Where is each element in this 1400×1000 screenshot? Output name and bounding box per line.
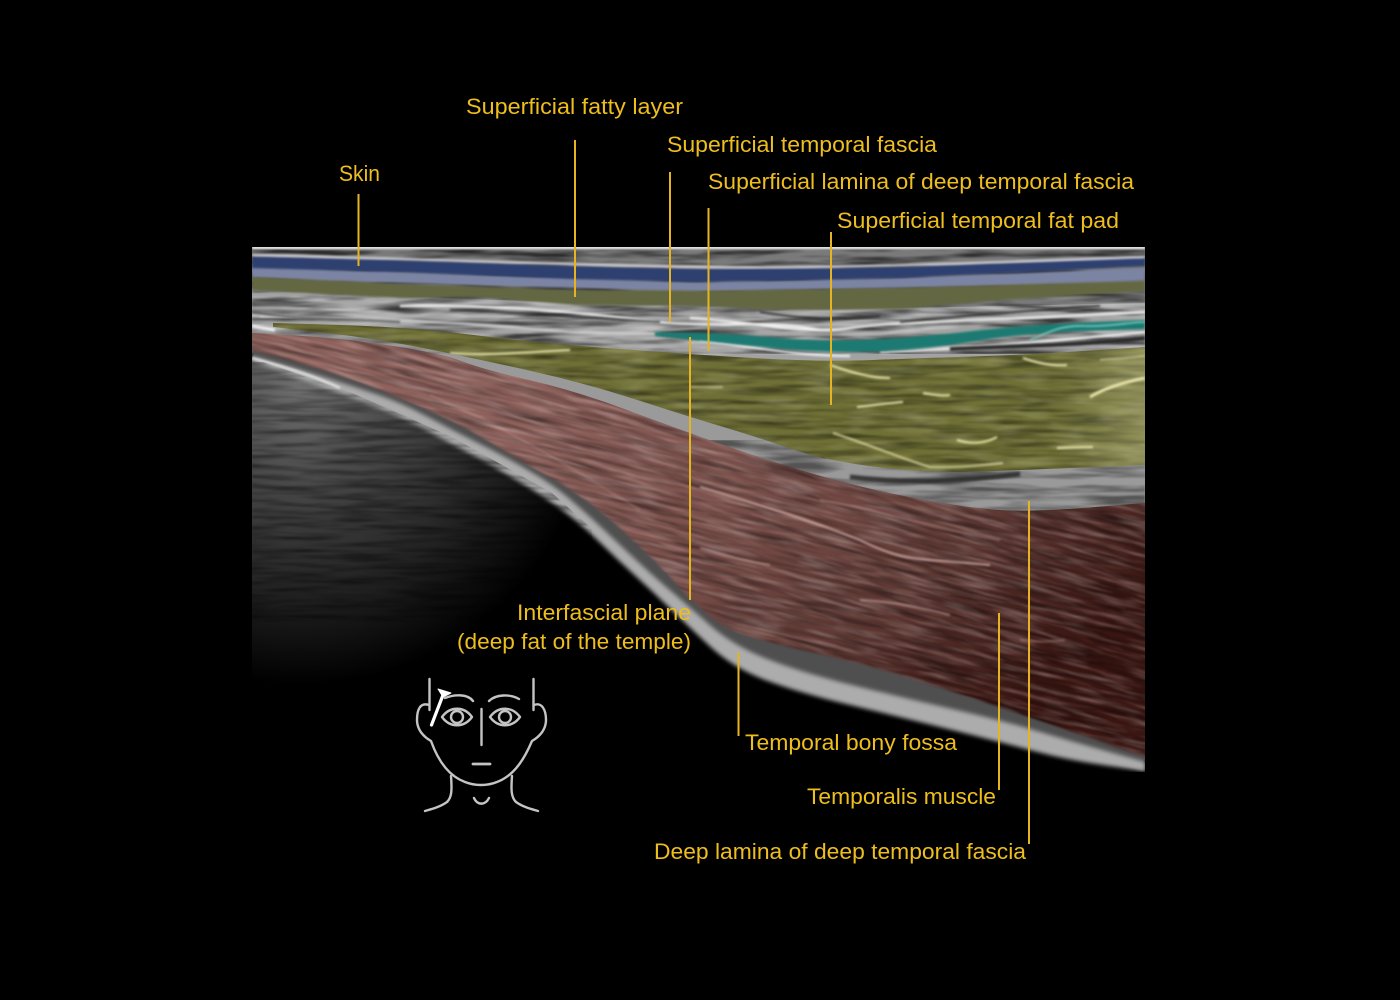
icon: face with probe position bbox=[417, 679, 546, 811]
icon part: ears and jaw bbox=[417, 704, 546, 785]
texture: deep speckle bbox=[252, 362, 592, 622]
icon part: ultrasound probe marker bbox=[432, 695, 443, 725]
texture: bright fibres bbox=[430, 395, 1065, 642]
label: interfascial plane: Interfascial plane bbox=[517, 600, 691, 625]
ultrasound image with coloured tissue layers bbox=[252, 247, 1145, 786]
label: deep fat of the temple: (deep fat of the temple) bbox=[457, 629, 691, 654]
layer: gray fascia bands bbox=[252, 288, 1145, 366]
label: superficial fatty layer: Superficial fatty layer bbox=[466, 94, 683, 119]
label: temporal bony fossa: Temporal bony fossa bbox=[745, 730, 958, 755]
icon part: right eye bbox=[490, 709, 520, 725]
layer: deep speckle below bone bbox=[252, 358, 547, 662]
icon part: eyebrows bbox=[445, 695, 519, 701]
texture: fat pad dark mottling bbox=[252, 320, 1145, 480]
layer: darker blue band bbox=[252, 256, 1145, 282]
icon part: neck bbox=[425, 776, 538, 811]
icon part: mouth bbox=[473, 763, 490, 765]
line: superficial fatty layer bbox=[574, 140, 576, 297]
icon part: collarbone notch bbox=[474, 798, 489, 804]
layer: temporal bone surface bbox=[252, 356, 1145, 771]
label: temporalis muscle: Temporalis muscle bbox=[807, 784, 996, 809]
line: superficial lamina bbox=[708, 208, 710, 351]
icon part: right iris bbox=[499, 711, 511, 723]
layer: teal fascial band bbox=[655, 320, 1145, 352]
texture: dark streaks in the gray fascia above the muscle bbox=[700, 440, 1145, 515]
icon part: probe arrowhead bbox=[438, 689, 451, 697]
layer: bright fascia streaks bbox=[252, 248, 1145, 356]
layer: white skin line bbox=[252, 255, 1145, 267]
texture: pale fibre noise bbox=[253, 334, 1145, 760]
pointer lines bbox=[358, 140, 1029, 844]
texture: fat pad pale mottling bbox=[275, 326, 1145, 472]
icon part: left eye bbox=[442, 709, 472, 725]
layer: temporalis muscle bbox=[252, 333, 1145, 760]
label: fat pad: Superficial temporal fat pad bbox=[837, 208, 1119, 233]
texture: dark streaks in the skin and fascia bbox=[252, 249, 1145, 354]
label: superficial lamina: Superficial lamina of deep temporal fascia bbox=[708, 169, 1135, 194]
layer: bright bone top edge bbox=[252, 358, 340, 388]
label: superficial temporal fascia: Superficial temporal fascia bbox=[667, 132, 938, 157]
icon part: left iris bbox=[451, 711, 463, 723]
texture: bright streaks in gray fascia bbox=[252, 295, 1145, 355]
line: deep lamina bbox=[1028, 501, 1030, 844]
line: fat pad bbox=[830, 232, 832, 405]
layer: superficial temporal fat pad bbox=[273, 323, 1145, 472]
layer: gray fascia above the muscle bbox=[252, 325, 1145, 520]
layer: superficial olive fatty layer bbox=[252, 277, 1145, 310]
texture: dark fibre noise bbox=[252, 333, 1145, 750]
layer: skin surface and gel bbox=[252, 247, 1145, 308]
layer: dark gap between muscle and bone bbox=[252, 350, 1145, 771]
line: skin bbox=[358, 194, 360, 266]
line: superficial temporal fascia bbox=[669, 172, 671, 322]
line: temporalis bbox=[998, 613, 1000, 790]
texture: fat pad bright lines bbox=[450, 350, 1145, 467]
label: deep lamina: Deep lamina of deep temporal fascia bbox=[654, 839, 1027, 864]
layer: teal highlight bbox=[1030, 322, 1145, 340]
label: skin: Skin bbox=[339, 161, 380, 186]
labels bbox=[339, 94, 1135, 864]
line: interfascial plane bbox=[689, 337, 691, 600]
line: bony fossa bbox=[738, 652, 740, 736]
layer: dark fascia streaks bbox=[252, 306, 1145, 481]
layer: pale blue lower dermis bbox=[252, 267, 1145, 291]
texture: pale right side of the fat pad bbox=[1066, 347, 1145, 468]
layer: muscle fibre streaks bbox=[252, 333, 1145, 760]
icon part: hair lines bbox=[430, 679, 534, 710]
icon part: nose bbox=[480, 709, 483, 745]
layer: fat pad echoes bbox=[252, 320, 1145, 480]
